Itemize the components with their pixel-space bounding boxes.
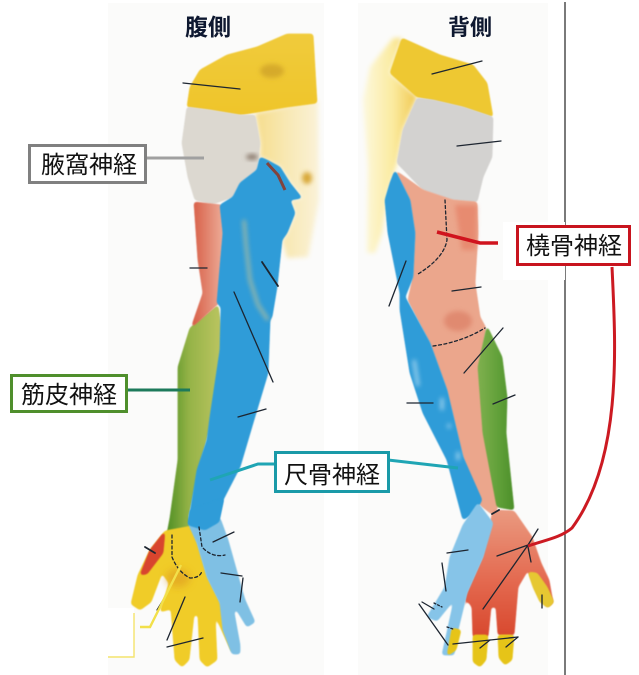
posterior arm region: salmon [395,170,498,515]
wrist blue [188,498,224,530]
label: radial nerve: 橈骨神経 [526,233,622,260]
heading: ventral side: 腹側 [185,14,231,40]
label: musculocutaneous nerve [12,376,126,412]
hand: orange red [458,510,553,637]
axillary region: grey [182,107,260,204]
arm illustration: dorsal side [363,38,554,667]
white patch behind bracket [108,608,134,657]
leader: axillary nerve [146,156,204,160]
axilla crease [246,154,258,160]
arm illustration: ventral side [131,34,319,667]
hand shading [166,569,190,587]
leader: radial nerve to arm [437,232,498,243]
orange tint [455,205,477,250]
leader: radial nerve to hand [528,267,615,546]
elbow shading [444,311,472,331]
heading: dorsal side: 背側 [448,15,492,40]
label: radial nerve [503,222,630,280]
label: axillary nerve [30,146,146,182]
pale specks in blue [414,360,458,460]
label: ulnar nerve [276,452,388,492]
leader [140,565,181,627]
label: musculocutaneous nerve: 筋皮神経 [21,382,117,409]
hand: light blue [188,518,255,654]
pointer lines: ventral side [145,83,278,647]
leader: musculocutaneous nerve [127,388,190,392]
finger tips: yellow [447,628,514,667]
thumb tip: yellow [528,572,554,608]
medial region: blue [385,170,482,520]
label: ulnar nerve: 尺骨神経 [284,462,380,489]
pointer lines: dorsal side [389,61,542,648]
forearm lateral region: green [167,305,222,534]
leaders: ulnar nerve [210,460,458,480]
hand: light blue [427,503,493,655]
axillary dark mark [267,163,285,190]
label: axillary nerve: 腋窩神経 [41,152,137,179]
shoulder region: axillary yellow [187,34,317,115]
yellow leader line on palm [108,565,181,657]
torso pale skin [363,38,417,253]
medial region: blue [188,157,302,528]
bracket [108,613,134,657]
hand: yellow [131,526,238,667]
shoulder shading [260,64,284,78]
forearm region: green [478,326,514,510]
pale streaks in blue [244,220,268,320]
axillary region: grey [397,98,493,202]
upper-arm lateral region: red [191,202,225,328]
page divider line [564,2,566,675]
torso pale skin [255,100,319,258]
shoulder region: axillary yellow [390,38,493,117]
nipple mark [302,172,312,184]
thumb base: red [140,531,165,575]
